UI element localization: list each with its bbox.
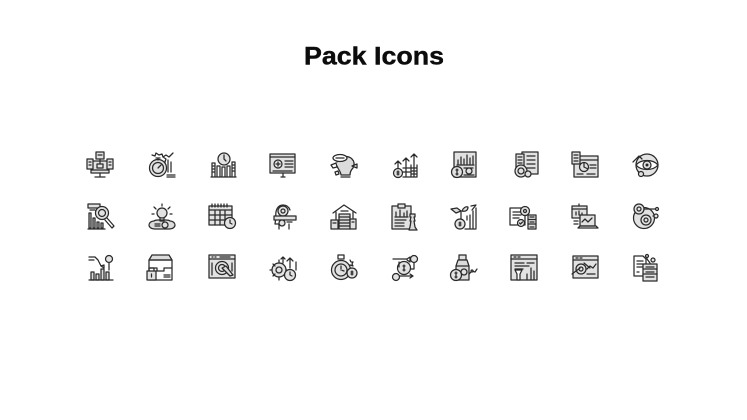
icon: target and gear [634,204,658,228]
icon: presentation board [270,154,295,177]
icon: chart with magnifier [88,204,114,229]
icon: coin stack network [450,255,477,280]
icon: document gear database [510,206,536,229]
icon: falling chart with coin [89,256,113,280]
icon: browser with pie chart [572,152,598,177]
icon: browser with gear and chart [572,256,598,278]
icon: lightbulb on cloud [149,204,175,229]
icon: head with target [274,205,296,229]
icon: clipboard with chess piece [392,204,417,230]
icon: archive box with lock [147,255,172,280]
icon: clock over bar chart [211,153,236,177]
icon: presentation and laptop [572,204,598,228]
title: Pack Icons [304,42,444,70]
icon: plant with growth chart [451,205,476,229]
icon: report with coin [452,152,476,178]
icon: warehouse [331,205,356,229]
icon: browser with target [209,255,235,278]
icon: coins with arrows [392,256,418,280]
icon: gears with arrows [270,257,296,280]
icon: monitor with panels [87,152,113,177]
icon grid [87,152,658,281]
icon: document and database [634,254,657,281]
icon: coin and growth arrows [394,154,417,178]
icon: stopwatch and chart [150,153,175,177]
icon: calendar and clock [209,204,236,228]
icon: eye with nodes [633,154,658,176]
icon: browser dashboard chart [511,255,537,280]
icon: head with speech bubbles [331,154,357,177]
icon: document with gears [515,152,538,177]
icon: stopwatch and coins [332,255,357,280]
